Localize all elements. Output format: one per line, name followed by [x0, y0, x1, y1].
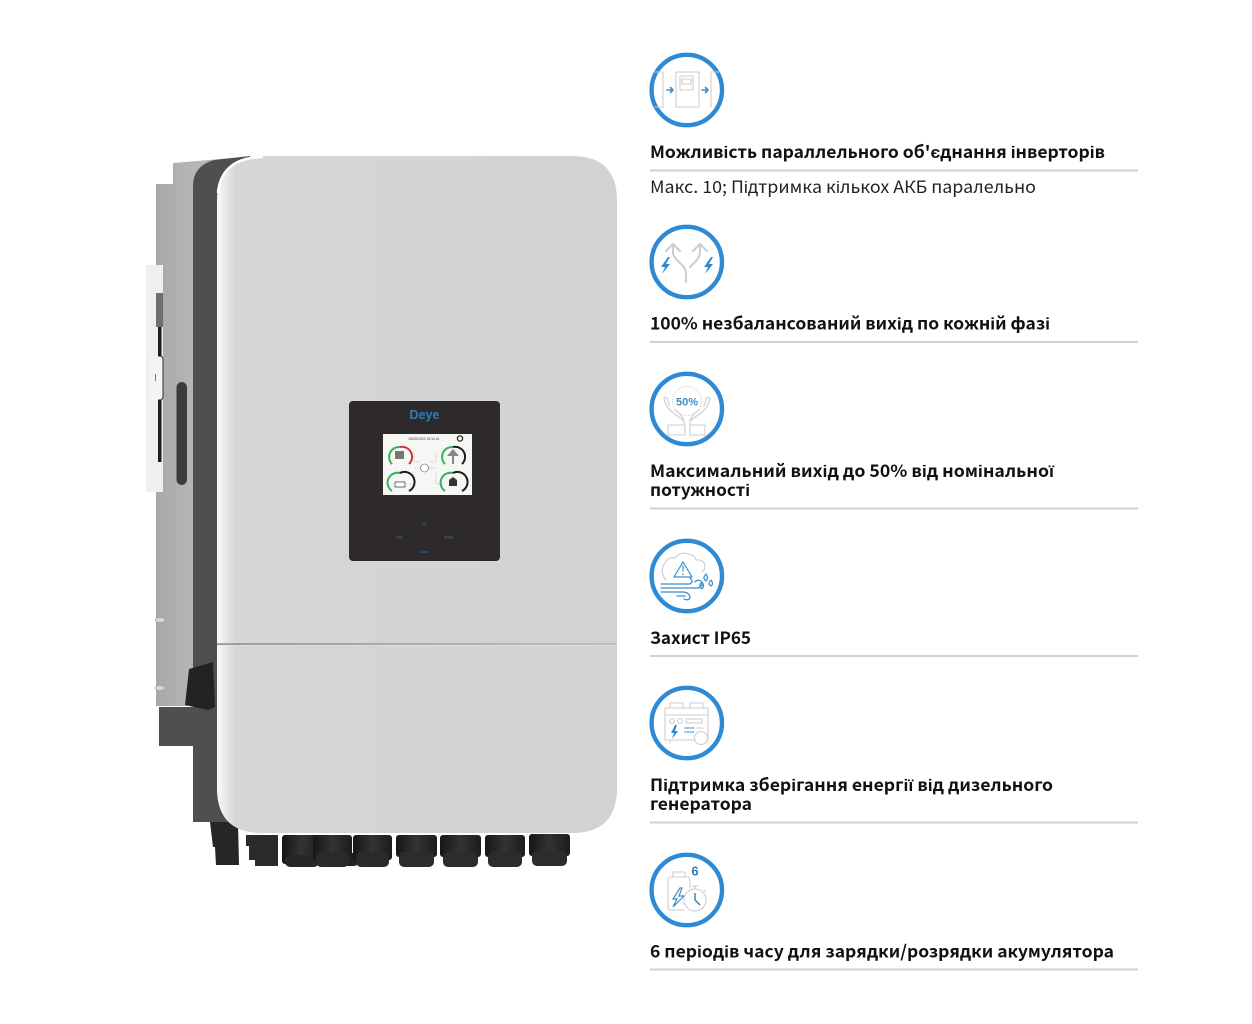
touch buttons — [397, 522, 454, 554]
screws — [155, 617, 165, 691]
display screen — [383, 434, 472, 495]
control panel — [349, 401, 500, 561]
brand logo: Deye — [410, 408, 439, 422]
icon: 50 percent hands — [652, 374, 722, 444]
touch buttons: Enter — [445, 536, 454, 540]
feature 3 — [650, 374, 1138, 510]
white bracket — [146, 265, 163, 492]
front panel — [217, 156, 617, 833]
cable connectors — [210, 822, 570, 867]
heading: 6 періодів часу для зарядки/розрядки акумулятора — [650, 938, 1114, 963]
icon: unbalanced output arrows — [652, 227, 722, 297]
feature 5: генератора — [650, 790, 752, 815]
mounting plate — [156, 157, 245, 706]
dark side housing — [159, 156, 250, 826]
divider — [650, 968, 1138, 970]
touch buttons: Down — [419, 550, 429, 554]
divider — [650, 341, 1138, 343]
icon: parallel inverters — [652, 55, 722, 125]
heading: Захист IP65 — [650, 624, 751, 649]
icon: 50 percent hands: 50% — [676, 396, 698, 408]
display screen: 05/28/2019 15:34:41 — [408, 437, 440, 441]
icon: battery and timer: 6 — [691, 864, 699, 878]
inverter product — [146, 156, 617, 867]
feature 2 — [650, 227, 1138, 343]
heading: Максимальний вихід до 50% від номінальної — [650, 457, 1055, 482]
heading: 100% незбалансований вихід по кожній фазі — [650, 310, 1050, 335]
icon: IP65 weather protection — [652, 541, 722, 611]
feature 1 — [650, 55, 1138, 198]
divider — [650, 822, 1138, 824]
icon: battery and timer — [652, 855, 722, 925]
handle — [185, 662, 215, 710]
heading: Підтримка зберігання енергії від дизельного — [650, 771, 1053, 796]
touch buttons: Esc — [397, 536, 403, 540]
feature 6 — [650, 855, 1138, 970]
feature 5 — [650, 688, 1138, 824]
divider — [650, 508, 1138, 510]
touch buttons: Up — [422, 522, 426, 526]
feature 4 — [650, 541, 1138, 657]
divider — [650, 170, 1138, 172]
feature 3: потужності — [650, 476, 750, 501]
divider — [650, 655, 1138, 657]
heading: Можливість параллельного об'єднання інверторів — [650, 138, 1105, 163]
icon: diesel generator — [652, 688, 722, 758]
side slot — [176, 382, 187, 485]
description: Макс. 10; Підтримка кількох АКБ паралельно — [650, 173, 1036, 198]
